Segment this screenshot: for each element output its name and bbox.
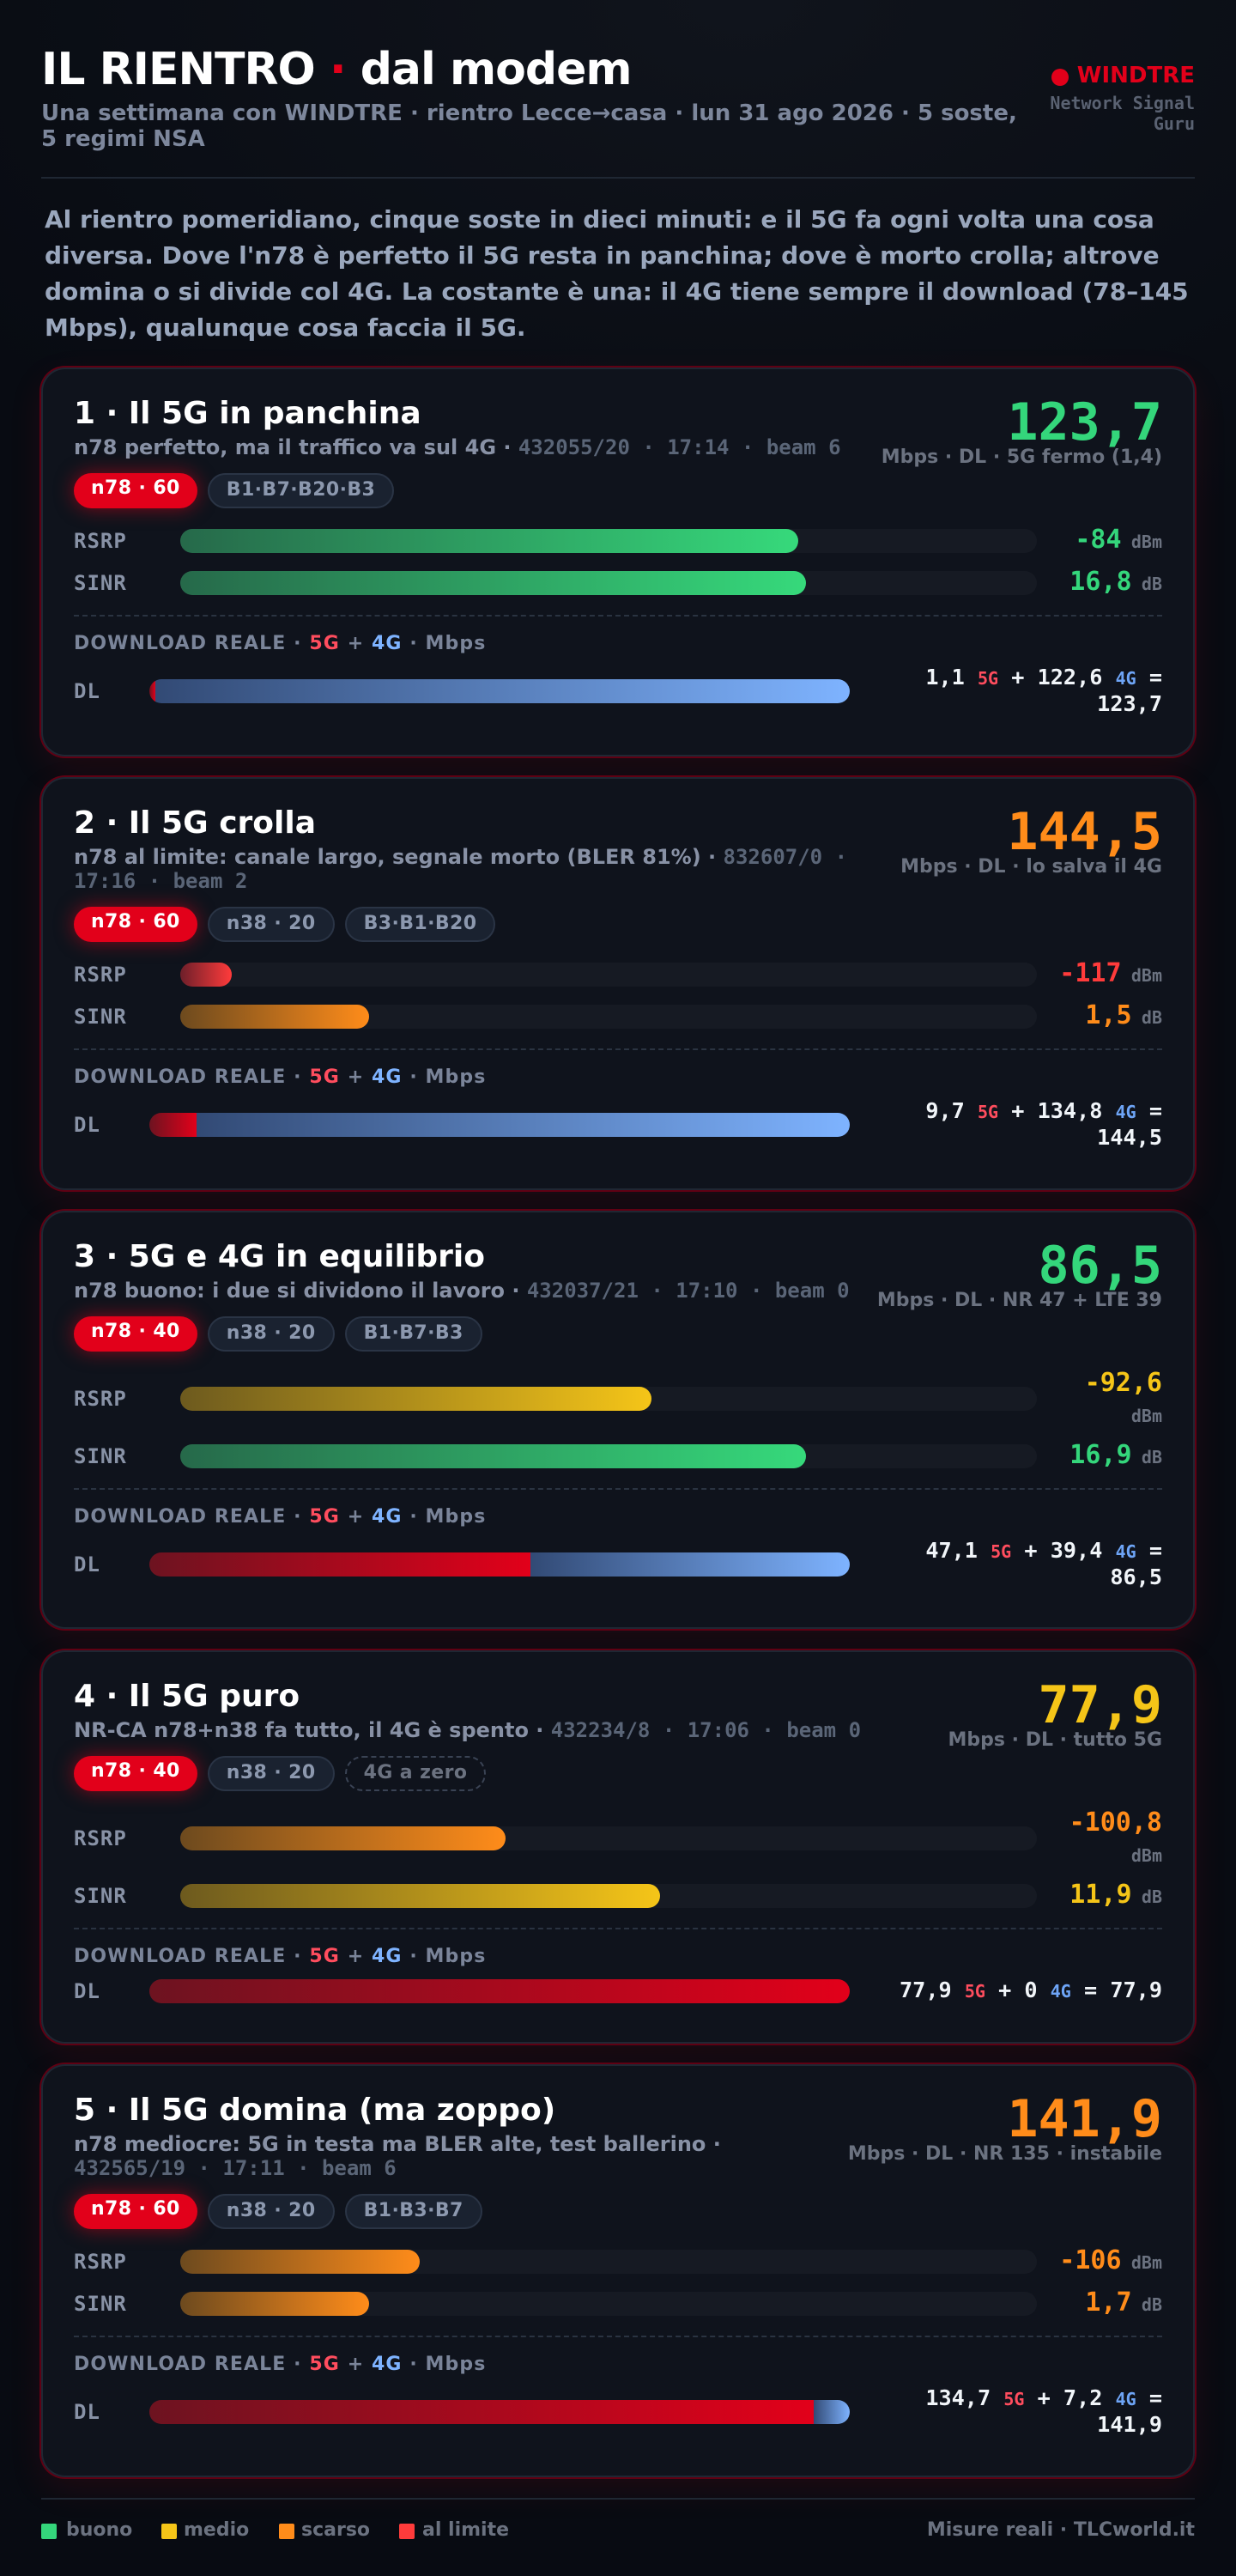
RSRP label: RSRP xyxy=(74,529,127,553)
RSRP bar xyxy=(180,963,1037,987)
subtitle: Una settimana con WINDTRE · rientro Lecce→casa · lun 31 ago 2026 · 5 soste, xyxy=(41,100,1017,126)
download sum xyxy=(925,665,1162,716)
download label: DOWNLOAD REALE · 5G + 4G · Mbps xyxy=(74,1506,486,1528)
download sum: 77,9 5G + 0 4G = 77,9 xyxy=(900,1978,1162,2002)
RSRP bar xyxy=(180,1387,1037,1411)
card title: 4 · Il 5G puro xyxy=(74,1679,300,1714)
download label: DOWNLOAD REALE · 5G + 4G · Mbps xyxy=(74,633,486,654)
RSRP value: dBm xyxy=(1131,1845,1162,1866)
card subtitle: n78 perfetto, ma il traffico va sul 4G · 432055/20 · 17:14 · beam 6 xyxy=(74,435,841,459)
SINR value: 16,9 dB xyxy=(1069,1440,1162,1470)
brand caption: Network Signal Guru xyxy=(1050,93,1195,134)
download bar xyxy=(149,679,850,703)
card subtitle: NR-CA n78+n38 fa tutto, il 4G è spento · 432234/8 · 17:06 · beam 0 xyxy=(74,1718,861,1742)
subtitle xyxy=(41,100,1017,152)
brand caption: Network Signal Guru: Guru xyxy=(1154,113,1195,134)
subtitle: 5 regimi NSA xyxy=(41,126,205,152)
band pills: B1·B7·B3 xyxy=(364,1322,464,1344)
band pills: B1·B7·B20·B3 xyxy=(227,479,375,501)
SINR bar xyxy=(180,571,1037,595)
RSRP bar xyxy=(180,529,1037,553)
panel: card 4 xyxy=(41,1650,1195,2044)
title: IL RIENTRO · dal modem xyxy=(41,44,632,95)
band pills: n78 · 60 xyxy=(91,911,180,933)
band pills xyxy=(64,2181,482,2242)
download sum: 123,7 xyxy=(1097,691,1162,716)
SINR value: 11,9 dB xyxy=(1069,1880,1162,1910)
SINR label: SINR xyxy=(74,1444,127,1468)
download bar xyxy=(149,2400,850,2424)
download sum xyxy=(925,1098,1162,1150)
download label: DOWNLOAD REALE · 5G + 4G · Mbps xyxy=(74,1946,486,1967)
download sum: 9,7 5G + 134,8 4G = xyxy=(925,1098,1162,1123)
legend: buono: buono xyxy=(66,2519,132,2541)
SINR bar xyxy=(180,1005,1037,1029)
RSRP label: RSRP xyxy=(74,1387,127,1411)
band pills: n78 · 40 xyxy=(91,1321,180,1342)
SINR value: 1,5 dB xyxy=(1085,1000,1162,1030)
band pills: n38 · 20 xyxy=(227,1322,316,1344)
download sum xyxy=(925,1538,1162,1589)
big number: 141,9 xyxy=(1007,2089,1162,2149)
big number: 86,5 xyxy=(1039,1236,1162,1296)
card subtitle: 17:16 · beam 2 xyxy=(74,869,247,893)
SINR label: SINR xyxy=(74,1005,127,1029)
DL label: DL xyxy=(74,679,100,703)
panel: card 1 xyxy=(41,368,1195,756)
big number caption: Mbps · DL · lo salva il 4G xyxy=(900,856,1162,878)
intro text: diversa. Dove l'n78 è perfetto il 5G resta in panchina; dove è morto crolla; altrove xyxy=(45,241,1160,270)
download label: DOWNLOAD REALE · 5G + 4G · Mbps xyxy=(74,1066,486,1088)
download sum: 1,1 5G + 122,6 4G = xyxy=(925,665,1162,690)
card subtitle: n78 buono: i due si dividono il lavoro · 432037/21 · 17:10 · beam 0 xyxy=(74,1279,850,1303)
intro text: domina o si divide col 4G. La costante è una: il 4G tiene sempre il download (78–145 xyxy=(45,277,1189,306)
card title: 3 · 5G e 4G in equilibrio xyxy=(74,1239,485,1274)
RSRP value: dBm xyxy=(1131,1406,1162,1426)
card title: 1 · Il 5G in panchina xyxy=(74,396,421,431)
card subtitle xyxy=(74,2132,721,2180)
RSRP label: RSRP xyxy=(74,2250,127,2274)
SINR label: SINR xyxy=(74,1884,127,1908)
band pills: n78 · 60 xyxy=(91,2198,180,2220)
RSRP value: -84 dBm xyxy=(1075,525,1162,555)
intro text: Al rientro pomeridiano, cinque soste in dieci minuti: e il 5G fa ogni volta una cosa xyxy=(45,205,1154,234)
band pills xyxy=(64,460,394,521)
card subtitle xyxy=(74,845,847,893)
legend: buono xyxy=(41,2519,132,2542)
band pills: n38 · 20 xyxy=(227,1762,316,1783)
download sum: 144,5 xyxy=(1097,1125,1162,1150)
big number: 77,9 xyxy=(1039,1675,1162,1735)
RSRP value: -117 dBm xyxy=(1059,958,1162,988)
card subtitle: 432565/19 · 17:11 · beam 6 xyxy=(74,2156,397,2180)
RSRP label: RSRP xyxy=(74,963,127,987)
DL label: DL xyxy=(74,2400,100,2424)
band pills xyxy=(64,1303,482,1364)
SINR bar xyxy=(180,2292,1037,2316)
download bar xyxy=(149,1979,850,2003)
card title: 5 · Il 5G domina (ma zoppo) xyxy=(74,2093,555,2128)
intro text xyxy=(45,205,1189,342)
panel: card 2 xyxy=(41,777,1195,1190)
download sum: 134,7 5G + 7,2 4G = xyxy=(925,2385,1162,2410)
RSRP value: -100,8 xyxy=(1069,1807,1162,1838)
big number caption: Mbps · DL · tutto 5G xyxy=(948,1729,1162,1751)
band pills: n78 · 40 xyxy=(91,1760,180,1782)
DL label: DL xyxy=(74,1552,100,1577)
band pills: n38 · 20 xyxy=(227,2200,316,2221)
SINR bar xyxy=(180,1444,1037,1468)
SINR label: SINR xyxy=(74,2292,127,2316)
download bar xyxy=(149,1113,850,1137)
RSRP label: RSRP xyxy=(74,1826,127,1850)
intro text: Mbps), qualunque cosa faccia il 5G. xyxy=(45,313,526,342)
card title: 2 · Il 5G crolla xyxy=(74,805,316,841)
RSRP value xyxy=(1069,1807,1162,1866)
brand caption: Network Signal Guru: Network Signal xyxy=(1050,93,1195,113)
big number caption: Mbps · DL · NR 47 + LTE 39 xyxy=(877,1290,1162,1311)
download sum xyxy=(925,2385,1162,2437)
SINR bar xyxy=(180,1884,1037,1908)
download label: DOWNLOAD REALE · 5G + 4G · Mbps xyxy=(74,2354,486,2375)
SINR label: SINR xyxy=(74,571,127,595)
band pills: B1·B3·B7 xyxy=(364,2200,464,2221)
band pills: n38 · 20 xyxy=(227,913,316,934)
band pills: n78 · 60 xyxy=(91,477,180,499)
card subtitle: n78 mediocre: 5G in testa ma BLER alte, test ballerino · xyxy=(74,2132,721,2156)
RSRP bar xyxy=(180,1826,1037,1850)
band pills xyxy=(64,894,495,955)
card subtitle: n78 al limite: canale largo, segnale morto (BLER 81%) · 832607/0 · xyxy=(74,845,847,869)
RSRP value xyxy=(1085,1368,1162,1426)
band pills xyxy=(64,1743,486,1804)
band pills: 4G a zero xyxy=(364,1762,467,1783)
big number caption: Mbps · DL · 5G fermo (1,4) xyxy=(882,447,1162,468)
RSRP value: -106 dBm xyxy=(1059,2245,1162,2275)
SINR value: 16,8 dB xyxy=(1069,567,1162,597)
brand: WINDTRE: WINDTRE xyxy=(1077,63,1195,88)
download sum: 47,1 5G + 39,4 4G = xyxy=(925,1538,1162,1563)
legend: medio: medio xyxy=(184,2519,249,2541)
big number: 123,7 xyxy=(1007,392,1162,453)
big number caption: Mbps · DL · NR 135 · instabile xyxy=(848,2143,1162,2165)
legend: scarso: scarso xyxy=(301,2519,370,2541)
source credit: Misure reali · TLCworld.it xyxy=(927,2519,1195,2541)
download sum: 141,9 xyxy=(1097,2412,1162,2437)
DL label: DL xyxy=(74,1113,100,1137)
big number: 144,5 xyxy=(1007,802,1162,862)
panel: card 5 xyxy=(41,2064,1195,2477)
band pills: B3·B1·B20 xyxy=(364,913,476,934)
panel: card 3 xyxy=(41,1211,1195,1629)
download sum: 86,5 xyxy=(1110,1564,1162,1589)
download bar xyxy=(149,1552,850,1577)
DL label: DL xyxy=(74,1979,100,2003)
legend: al limite: al limite xyxy=(422,2519,509,2541)
SINR value: 1,7 dB xyxy=(1085,2287,1162,2318)
RSRP bar xyxy=(180,2250,1037,2274)
footer: legend and source xyxy=(41,2519,1195,2542)
RSRP value: -92,6 xyxy=(1085,1368,1162,1398)
